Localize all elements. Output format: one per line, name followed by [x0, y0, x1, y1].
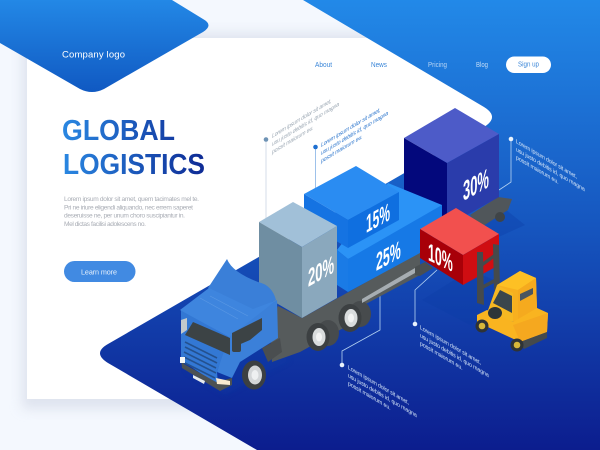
callout: blue note: possit maiorum eu. [320, 134, 363, 166]
logo badge: Company logo [62, 50, 125, 60]
callout: blue note: Lorem ipsum dolor sit amet, [321, 107, 381, 149]
box: 20 percent [259, 202, 337, 318]
box: 15 percent [304, 166, 399, 248]
mast [477, 244, 500, 305]
body text: Mel dictas facilisi adolescens no. [64, 221, 146, 228]
truck bed [270, 252, 433, 362]
callout: blue note: usu justo debitis id, quo magna [321, 110, 389, 157]
body text [64, 196, 199, 228]
forklift [476, 244, 548, 352]
truck cab [180, 259, 282, 391]
white content panel [27, 38, 527, 399]
box: 25 percent [337, 183, 442, 292]
rear wheels [306, 301, 371, 351]
body text: deseruisse ne, per unum choro suscipiantur in. [64, 212, 185, 220]
side rail [362, 268, 415, 303]
callout: middle note [413, 270, 489, 380]
box: 20 percent: 20% [308, 250, 334, 293]
front wheel [242, 360, 266, 390]
callout: grey note: possit maiorum eu. [271, 125, 314, 157]
callout: middle note: usu justo debitis id, quo magna [420, 333, 489, 380]
navigation: Pricing [428, 62, 447, 69]
callout: middle note: Lorem ipsum dolor sit amet, [420, 325, 481, 367]
callout: lower note: possit maiorum eu. [348, 381, 391, 412]
learn more button: Learn more [81, 268, 117, 276]
navigation [315, 56, 551, 73]
navigation: About [315, 62, 332, 69]
body text: Lorem ipsum dolor sit amet, quem tacimates mel te. [64, 196, 199, 203]
callout: right note: usu justo debitis id, quo magna [516, 147, 585, 194]
logo badge [0, 0, 208, 92]
navigation: Sign up [518, 62, 539, 68]
box: 15 percent: 15% [366, 199, 390, 239]
callout: right note [499, 137, 585, 194]
title: LOGISTICS [63, 149, 205, 181]
box: 30 percent: 30% [463, 162, 489, 207]
box: 25 percent: 25% [376, 236, 401, 277]
callout: right note: possit maiorum eu. [516, 155, 559, 186]
callout: middle note: possit maiorum eu. [420, 341, 463, 372]
box: 10 percent [420, 208, 499, 285]
navigation: News [371, 62, 387, 69]
callout: right note: Lorem ipsum dolor sit amet, [516, 139, 577, 181]
radiator grille [183, 342, 217, 378]
callout: lower note: usu justo debitis id, quo magna [348, 373, 417, 420]
callout: grey note [264, 98, 340, 225]
box: 30 percent [404, 108, 499, 226]
callout: grey note: Lorem ipsum dolor sit amet, [272, 98, 332, 140]
body text: Pri ne iriure eligendi aliquando, nec errem saperet [64, 204, 193, 212]
title [62, 115, 205, 181]
navigation: Blog [476, 62, 488, 69]
page panel shadow [22, 33, 452, 409]
bumper [181, 358, 232, 391]
learn more button [64, 261, 136, 282]
callout: lower note: Lorem ipsum dolor sit amet, [348, 365, 409, 407]
truck rear chassis [470, 197, 512, 228]
box: 10 percent: 10% [428, 239, 453, 278]
callout: blue note [313, 107, 389, 192]
ground shadows [185, 205, 530, 395]
callout: grey note: usu justo debitis id, quo magna [272, 101, 340, 148]
title: GLOBAL [62, 115, 175, 147]
callout: lower note [340, 275, 417, 420]
